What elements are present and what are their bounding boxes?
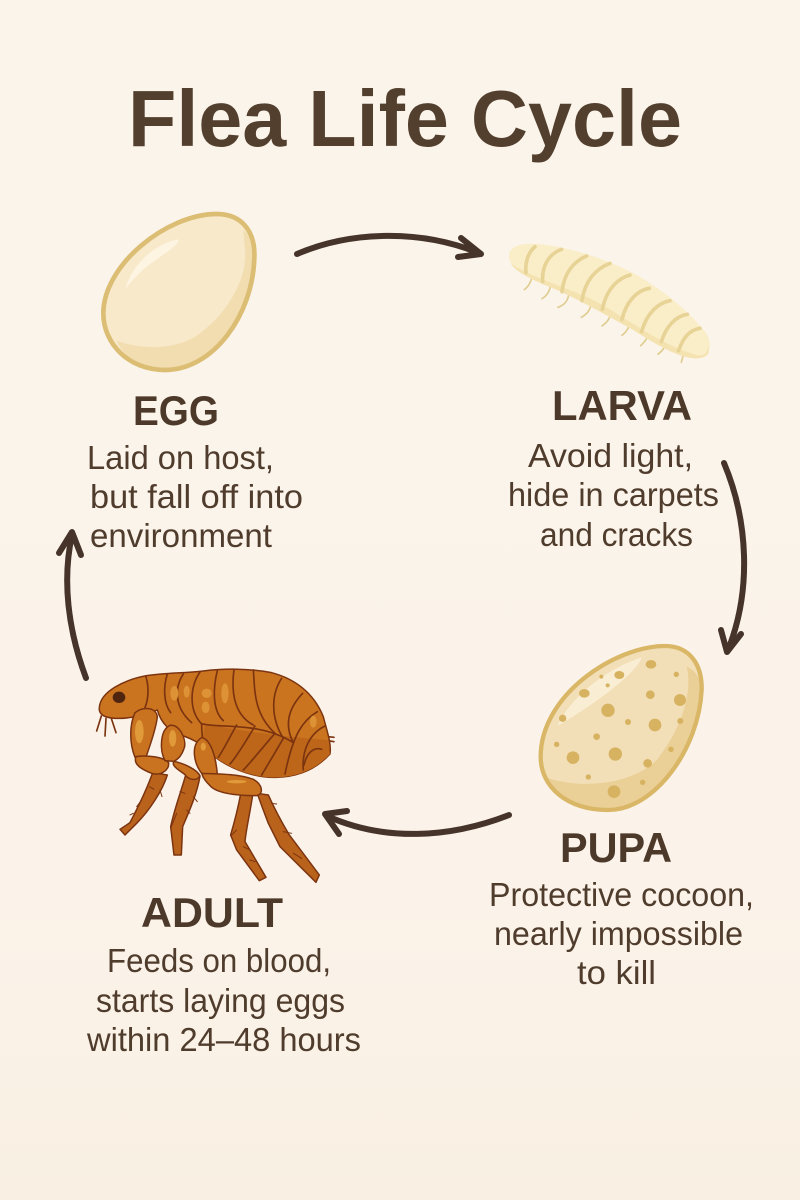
label: larva: hide in carpets [508, 476, 719, 513]
label: pupa: PUPA [560, 824, 672, 871]
label: egg: EGG [133, 387, 219, 434]
arrow: adult to egg [59, 532, 86, 678]
label: egg [87, 387, 303, 554]
label: larva: and cracks [540, 516, 693, 553]
flea segments [145, 669, 325, 775]
flea body [99, 669, 330, 777]
label: pupa: to kill [577, 954, 656, 991]
label: larva: LARVA [552, 382, 692, 429]
flea highlights [170, 683, 317, 728]
label: adult: within 24–48 hours [86, 1021, 361, 1058]
icon: pupa [541, 646, 702, 810]
flea leg hairs [130, 787, 302, 862]
flea eye [113, 692, 125, 703]
label: egg: but fall off into [90, 478, 303, 515]
arrow: pupa to adult [325, 811, 509, 834]
label: egg: Laid on host, [87, 439, 274, 476]
label: larva: Avoid light, [528, 437, 693, 474]
flea upper legs [131, 708, 261, 796]
icon: egg [103, 214, 254, 370]
flea leg highlights [135, 720, 247, 783]
label: adult [86, 889, 361, 1058]
arrow: larva to pupa [721, 463, 744, 652]
arrow: egg to larva [297, 236, 481, 257]
flea legs [120, 773, 319, 882]
icon: adult flea [97, 669, 334, 882]
label: pupa: Protective cocoon, [489, 876, 754, 913]
title: Flea Life Cycle [128, 74, 682, 163]
label: pupa [489, 824, 754, 991]
label: larva [508, 382, 719, 553]
label: pupa: nearly impossible [494, 915, 743, 952]
label: adult: ADULT [141, 889, 283, 936]
label: adult: starts laying eggs [96, 982, 345, 1019]
icon: larva [509, 244, 710, 362]
label: egg: environment [90, 517, 272, 554]
label: adult: Feeds on blood, [107, 942, 331, 979]
